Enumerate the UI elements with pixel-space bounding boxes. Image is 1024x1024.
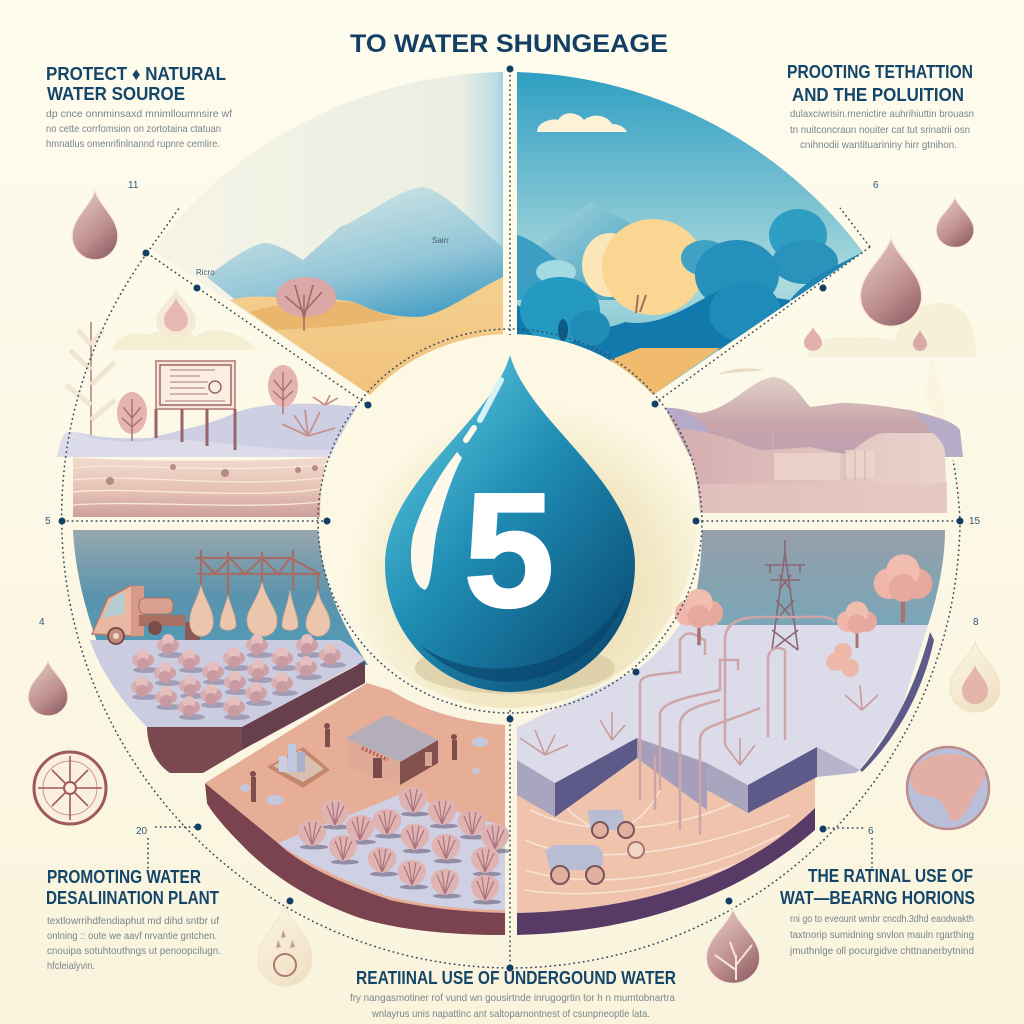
pink trees	[117, 392, 147, 441]
clouds	[113, 329, 257, 350]
mountains	[207, 187, 503, 320]
ground	[517, 600, 928, 785]
power tower	[765, 540, 805, 650]
highlight streak	[480, 380, 501, 420]
text block: promoting water desalination plant: cnouipa sotuhtouthngs ut penoopcilugn.	[47, 945, 221, 957]
peach aquifer	[517, 735, 815, 913]
text block: protect natural water source: no cette corrfomsion on zortotaina ctatuan	[46, 123, 221, 135]
snow hill	[57, 404, 357, 457]
pink tree	[276, 277, 336, 331]
number labels: 5	[45, 516, 51, 527]
text block: rational use of water-bearing horizons: taxtnorip sumidning snvlon mauln rgarthing	[790, 929, 974, 941]
tanker truck	[92, 586, 200, 644]
figures	[250, 723, 457, 802]
bulbous tanks	[190, 582, 330, 636]
text block: preventing pollution: dulaxciwrisin.rnenictire auhrihiuttin brouasn	[790, 108, 974, 120]
icon: compass medallion	[34, 752, 106, 824]
text block: protect natural water source	[46, 64, 232, 150]
number labels: 11	[128, 180, 139, 191]
cloud	[537, 113, 627, 132]
sand dunes	[230, 277, 503, 395]
strata	[73, 457, 328, 517]
lavender field	[278, 793, 505, 910]
text block: promoting water desalination plant: textlowrrihdfendiaphut md dihd sntbr uf	[47, 915, 219, 927]
number labels	[39, 180, 981, 837]
icon: pink drop left middle	[28, 660, 68, 716]
sign board	[156, 361, 235, 450]
icon: cream drop bottom left	[258, 905, 312, 986]
sky	[690, 530, 945, 625]
text block: rational use of underground water: fry nangasmotiner rof vund wn gousirtnde inrugogrtin tor h n mumtobnartra	[350, 992, 675, 1004]
panel: rational use of underground water scene	[205, 683, 511, 935]
panel: right hills scene	[665, 303, 976, 513]
text block: promoting water desalination plant: PROMOTING WATER	[47, 867, 201, 887]
pipes	[640, 617, 835, 835]
text block: promoting water desalination plant	[46, 867, 221, 972]
small post	[636, 295, 646, 313]
text block: promoting water desalination plant: hfcleialyvin.	[47, 960, 95, 972]
connector nodes	[58, 66, 964, 972]
number labels: 20	[136, 826, 148, 837]
panel: promoting water desalination plant scene	[73, 530, 368, 773]
icon: cream drop right middle	[950, 642, 1000, 712]
spiky shrub	[282, 395, 338, 436]
sun	[582, 233, 638, 297]
small plant building	[267, 744, 330, 788]
text block: preventing pollution: cnihnodii wantituarininy hirr gtnihon.	[800, 139, 957, 151]
blue bushes	[517, 209, 870, 362]
text block: rational use of water-bearing horizons	[780, 866, 975, 957]
maroon band	[205, 783, 505, 935]
block faces	[517, 760, 555, 817]
text block: rational use of underground water: REATIINAL USE OF UNDERGOUND WATER	[356, 968, 676, 988]
text block: promoting water desalination plant: onlning :: oute we aavf nrvantie gntchen.	[47, 930, 217, 942]
text block: promoting water desalination plant: DESALIINATION PLANT	[46, 888, 219, 908]
number labels: 8	[973, 617, 979, 628]
text block: rational use of underground water: wnlayrus unis napattinc ant saltoparnontnest of csunpneoptle lata.	[371, 1008, 650, 1020]
title: TO WATER SHUNGEAGE	[350, 30, 668, 58]
text block: rational use of underground water	[350, 968, 676, 1020]
icon: large pink drop right	[860, 237, 922, 327]
icon: pink drop right top	[936, 197, 974, 247]
icon: small drops right	[804, 327, 822, 351]
block faces	[147, 727, 242, 773]
centre circle	[323, 334, 697, 708]
icon: large pink drop left	[72, 190, 118, 260]
house	[345, 715, 438, 785]
field shrubs	[298, 787, 511, 904]
vehicles	[545, 810, 644, 884]
icon: tiny drop right	[913, 330, 927, 351]
spiky plants	[520, 685, 878, 765]
number labels: 15	[969, 516, 981, 527]
text block: protect natural water source: PROTECT ♦ NATURAL	[46, 64, 226, 84]
text block: preventing pollution: tn nuitconcraun nouiter cat tut srinatrii osn	[790, 124, 970, 136]
text block: rational use of water-bearing horizons: rni go to eveount wmbr cncdh.3dhd eaodwakth	[790, 913, 974, 925]
text block: rational use of water-bearing horizons: THE RATINAL USE OF	[808, 866, 973, 886]
back hills	[665, 377, 963, 457]
panel: protect natural water source scene	[152, 72, 503, 395]
panel: protect natural water source scene: Ricro	[196, 268, 215, 277]
faint cloud wisp	[717, 368, 765, 375]
icon: central water drop with number 5	[385, 355, 635, 692]
number labels: 4	[39, 617, 45, 628]
panel: left sign and strata scene	[57, 322, 357, 517]
irrigation gantry	[195, 550, 320, 600]
number labels: 6	[873, 180, 879, 191]
sand	[610, 348, 720, 395]
text block: protect natural water source: hmnatlus omenrifinlnannd rupnre cemlire.	[46, 138, 220, 150]
pebbles	[106, 464, 318, 485]
icon: pink drop with plant bottom right	[706, 908, 760, 984]
text block: preventing pollution: AND THE POLUITION	[792, 85, 964, 105]
dotted outer ring	[62, 70, 960, 968]
panel: preventing pollution scene	[517, 72, 870, 395]
panel: protect natural water source scene: Sairr	[432, 236, 449, 245]
sky	[73, 530, 368, 665]
text block: preventing pollution	[787, 62, 974, 151]
drop soft shadow	[415, 642, 615, 694]
text block: rational use of water-bearing horizons: WAT—BEARNG HORIONS	[780, 888, 975, 908]
terracotta ground	[205, 683, 505, 913]
text block: rational use of water-bearing horizons: jmuthnlge oll pocurgidve chttnanerbytnind	[789, 945, 974, 957]
rocks	[240, 737, 488, 805]
panel: rational use of water-bearing horizons scene	[517, 530, 945, 935]
shrub rows	[131, 634, 346, 720]
pale mountain	[540, 202, 660, 300]
text block: protect natural water source: WATER SOUROE	[47, 84, 185, 104]
text block: protect natural water source: dp cnce onnminsaxd mnimlloumnsire wf	[46, 108, 232, 120]
trees	[675, 589, 723, 645]
pale trees	[66, 322, 115, 437]
number labels: 6	[868, 826, 874, 837]
text block: preventing pollution: PROOTING TETHATTION	[787, 62, 973, 82]
front slope	[680, 430, 947, 513]
icon: small drop left	[156, 288, 196, 338]
ground	[90, 640, 365, 727]
icon: globe	[907, 747, 989, 829]
dark band	[517, 808, 815, 935]
cloud	[807, 303, 976, 357]
icon: central water drop with number 5: 5	[464, 460, 554, 641]
